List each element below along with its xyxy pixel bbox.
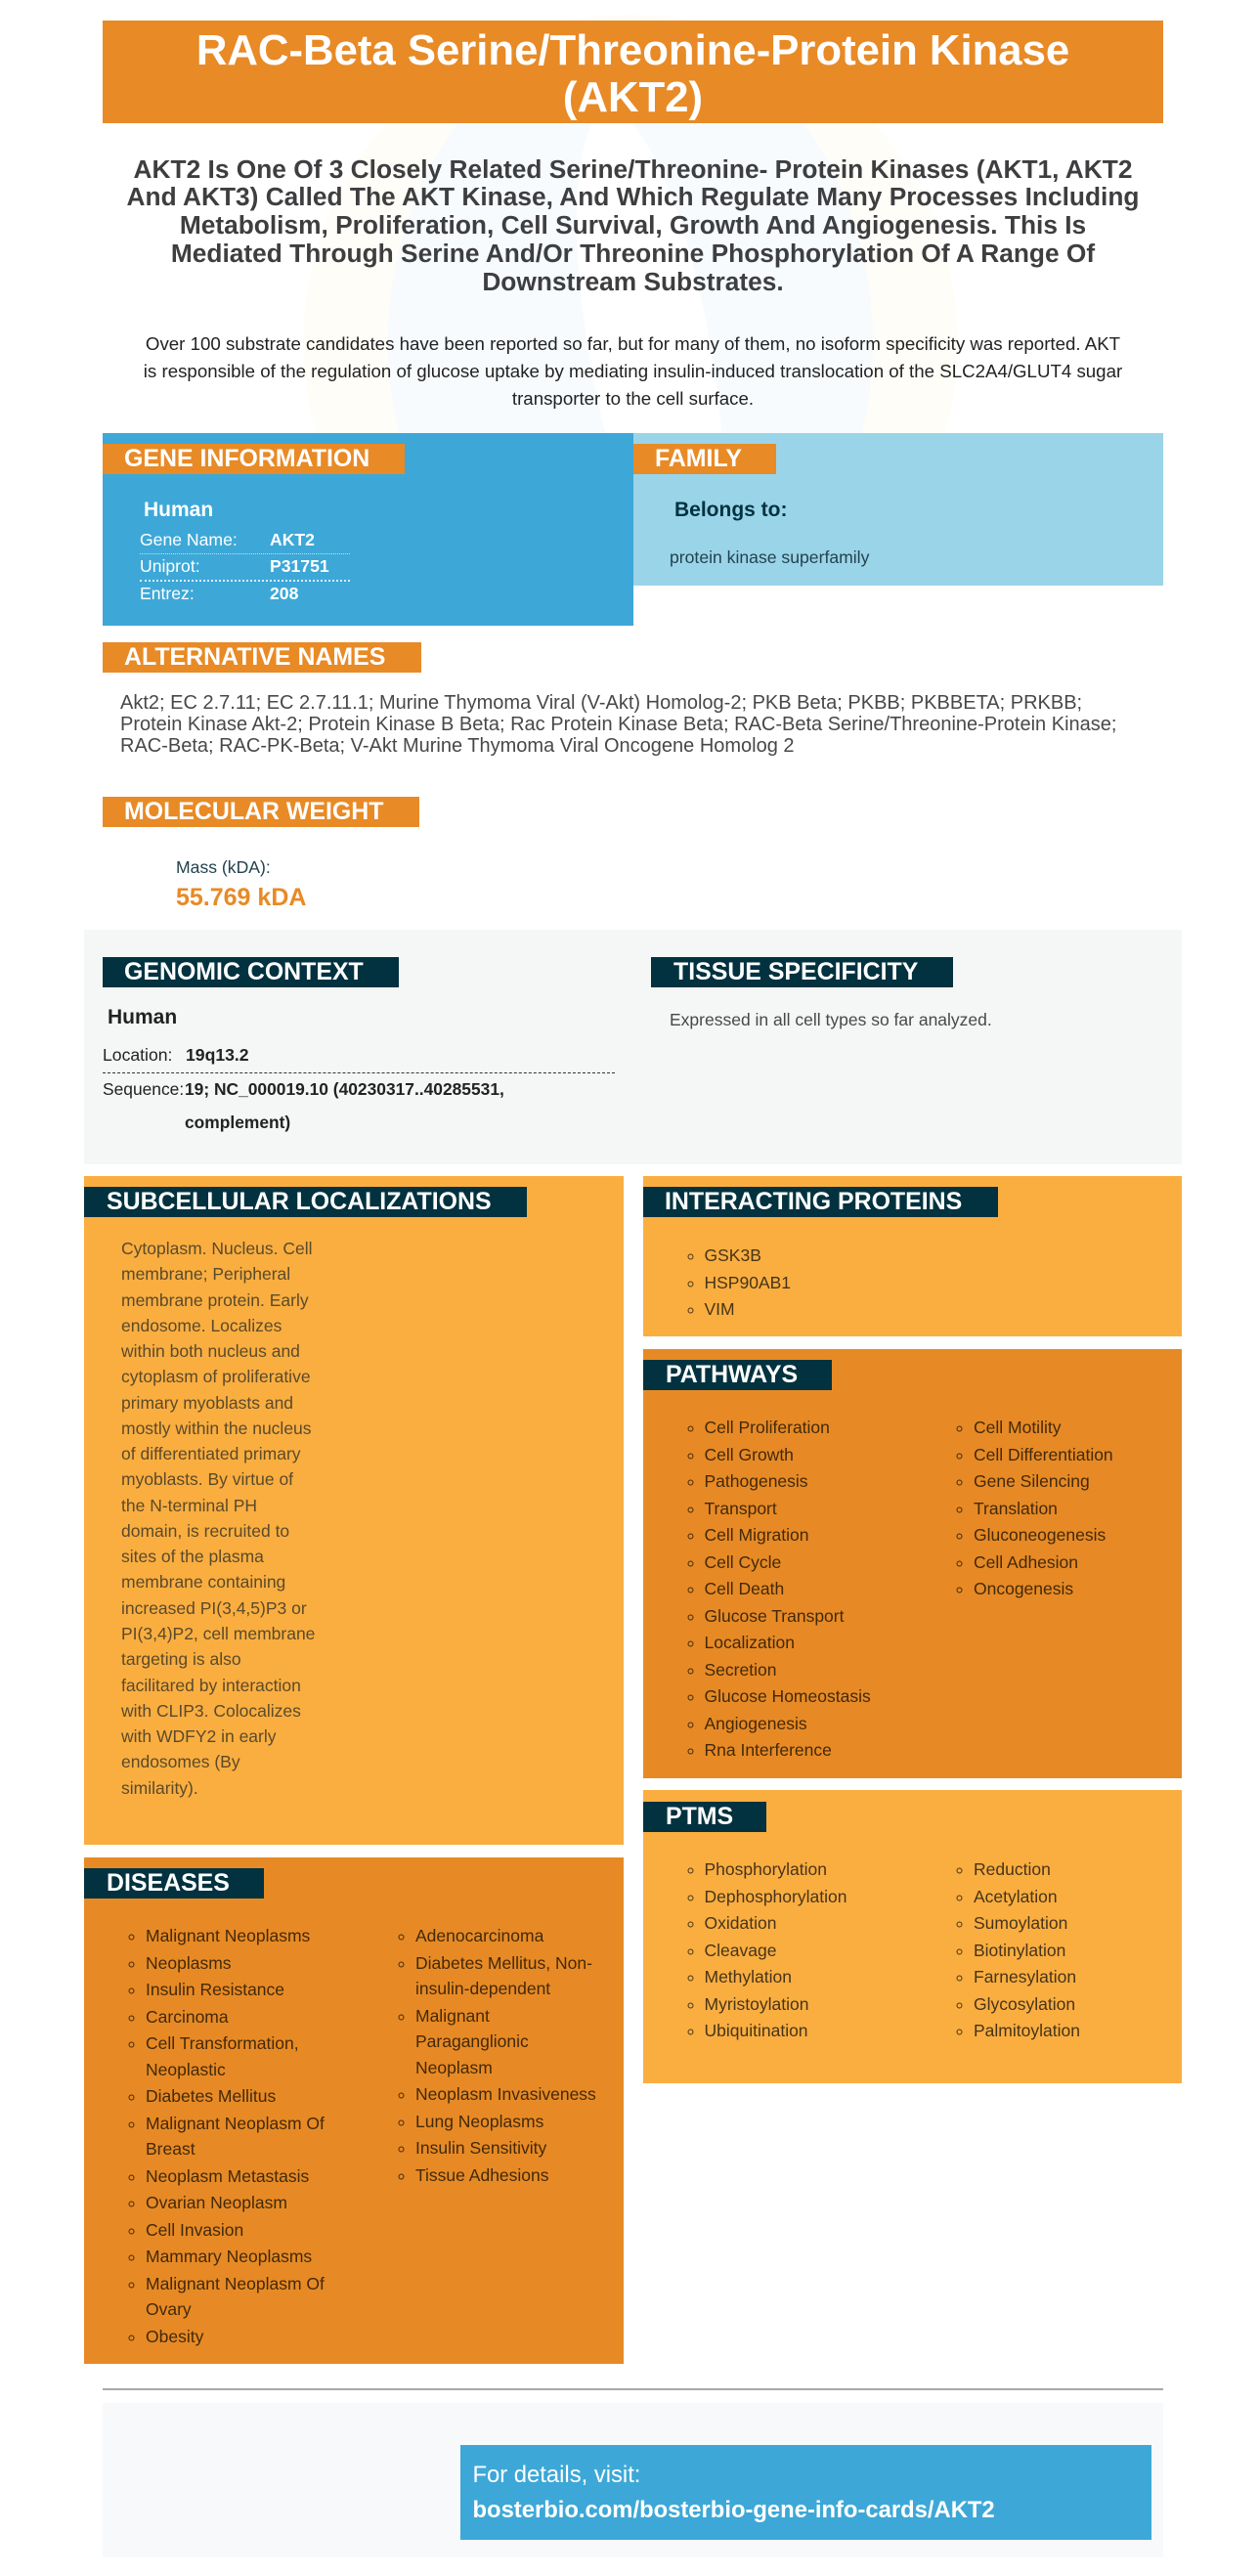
ptms list column 2: Palmitoylation [974, 2021, 1080, 2040]
diseases list column 1: Mammary Neoplasms [146, 2247, 312, 2266]
heading: ptms: PTMS [666, 1803, 733, 1830]
diseases list column 1: Breast [146, 2139, 195, 2159]
interacting proteins list [688, 1245, 791, 1319]
intro paragraph [144, 333, 1122, 409]
pathways list column 1: Rna Interference [704, 1740, 832, 1760]
molecular weight value [176, 857, 306, 911]
localization text: facilitared by interaction [121, 1676, 301, 1695]
pathways list column 1: Cell Death [704, 1579, 784, 1598]
localization text: primary myoblasts and [121, 1393, 293, 1413]
panel: diseases [84, 1857, 624, 2364]
intro paragraph: Over 100 substrate candidates have been reported so far, but for many of them, no isoform specificity was reported. AKT [146, 333, 1120, 354]
diseases list column 1: Malignant Neoplasm Of [146, 2114, 325, 2133]
localization text: sites of the plasma [121, 1547, 264, 1566]
pathways list column 1: Cell Proliferation [704, 1418, 830, 1437]
pathways list column 2: Gluconeogenesis [974, 1525, 1106, 1545]
diseases list column 1: Carcinoma [146, 2007, 229, 2027]
interacting proteins list: VIM [704, 1299, 735, 1319]
localization text: membrane containing [121, 1572, 285, 1592]
heading: alternative names: ALTERNATIVE NAMES [124, 643, 385, 671]
ptms list column 2: Reduction [974, 1859, 1051, 1879]
tissue specificity text: Expressed in all cell types so far analyzed. [670, 1010, 992, 1029]
title banner [103, 21, 1163, 123]
summary heading: Metabolism, Proliferation, Cell Survival, Growth And Angiogenesis. This Is [180, 210, 1086, 240]
heading: family: FAMILY [655, 445, 742, 472]
species label: Human [144, 499, 213, 521]
panel: gene information [103, 433, 633, 626]
diseases list column 1: Malignant Neoplasms [146, 1926, 310, 1945]
pathways list column 1: Transport [704, 1498, 777, 1517]
localization text: of differentiated primary [121, 1444, 301, 1463]
diseases list column 2: Lung Neoplasms [415, 2112, 543, 2131]
gene name row: Gene Name: [140, 530, 238, 549]
uniprot row: P31751 [270, 556, 329, 576]
diseases list column 2: Neoplasm Invasiveness [415, 2084, 596, 2104]
localization text: myoblasts. By virtue of [121, 1469, 293, 1489]
intro paragraph: transporter to the cell surface. [512, 388, 754, 409]
location row [103, 1043, 615, 1073]
belongs to label: Belongs to: [674, 499, 788, 521]
panel: interacting proteins [643, 1176, 1182, 1336]
entrez row [140, 584, 298, 603]
pathways list column 1: Localization [704, 1633, 795, 1652]
diseases list column 1: Malignant Neoplasm Of [146, 2274, 325, 2293]
title banner: RAC-Beta Serine/Threonine-Protein Kinase [196, 26, 1069, 74]
gene name row: AKT2 [270, 530, 315, 549]
footer panel [103, 2403, 1163, 2557]
panel: ptms [643, 1790, 1182, 2083]
heading: subcellular localizations: SUBCELLULAR LOCALIZATIONS [107, 1188, 492, 1215]
heading: diseases: DISEASES [107, 1869, 230, 1897]
localization text: the N-terminal PH [121, 1496, 257, 1515]
diseases list column 1 [129, 1926, 325, 2346]
localization text: membrane protein. Early [121, 1290, 309, 1310]
ptms list column 1: Oxidation [704, 1913, 776, 1933]
diseases list column 1: Diabetes Mellitus [146, 2086, 276, 2106]
details label: For details, visit: [473, 2462, 640, 2488]
gene name row [140, 528, 350, 554]
ptms list column 2 [956, 1859, 1080, 2040]
diseases list column 2: Diabetes Mellitus, Non- [415, 1953, 592, 1973]
entrez row: 208 [270, 584, 298, 603]
species label: Human [108, 1006, 177, 1028]
localization text: increased PI(3,4,5)P3 or [121, 1598, 307, 1618]
pathways list column 2: Cell Differentiation [974, 1445, 1113, 1464]
diseases list column 2: Adenocarcinoma [415, 1926, 543, 1945]
ptms list column 1: Myristoylation [704, 1994, 808, 2014]
location row: Location: [103, 1045, 172, 1065]
diseases list column 1: Ovary [146, 2299, 192, 2319]
ptms list column 2: Glycosylation [974, 1994, 1075, 2014]
alternative names text: Protein Kinase Akt-2; Protein Kinase B Beta; Rac Protein Kinase Beta; RAC-Beta Serine/Threonine-Protein Kinase; [120, 714, 1116, 735]
diseases list column 1: Neoplasms [146, 1953, 232, 1973]
pathways list column 2: Oncogenesis [974, 1579, 1073, 1598]
pathways list column 2: Gene Silencing [974, 1471, 1090, 1491]
diseases list column 2: Malignant [415, 2006, 490, 2026]
uniprot row [140, 554, 350, 582]
diseases list column 1: Insulin Resistance [146, 1980, 284, 1999]
diseases list column 2 [399, 1926, 596, 2185]
pathways list column 2: Cell Motility [974, 1418, 1061, 1437]
diseases list column 1: Neoplasm Metastasis [146, 2166, 309, 2186]
interacting proteins list: HSP90AB1 [704, 1273, 791, 1292]
localization text: PI(3,4)P2, cell membrane [121, 1624, 315, 1643]
alternative names text: RAC-Beta; RAC-PK-Beta; V-Akt Murine Thymoma Viral Oncogene Homolog 2 [120, 735, 795, 757]
pathways list column 2 [956, 1418, 1113, 1598]
localization text: domain, is recruited to [121, 1521, 289, 1541]
summary heading: And AKT3) Called The AKT Kinase, And Which Regulate Many Processes Including [127, 182, 1139, 211]
localization text: with WDFY2 in early [121, 1726, 277, 1746]
ptms list column 1: Phosphorylation [704, 1859, 827, 1879]
ptms list column 1: Ubiquitination [704, 2021, 808, 2040]
family value: protein kinase superfamily [670, 547, 869, 567]
callout: details link [460, 2445, 1151, 2540]
details url: bosterbio.com/bosterbio-gene-info-cards/AKT2 [473, 2497, 995, 2523]
pathways list column 1 [688, 1418, 871, 1760]
panel: family [633, 433, 1163, 586]
heading: interacting proteins: INTERACTING PROTEINS [665, 1188, 962, 1215]
pathways list column 1: Secretion [704, 1660, 776, 1680]
interacting proteins list: GSK3B [704, 1245, 761, 1265]
diseases list column 2: Neoplasm [415, 2058, 493, 2077]
pathways list column 1: Glucose Transport [704, 1605, 844, 1625]
pathways list column 1: Pathogenesis [704, 1471, 808, 1491]
diseases list column 2: insulin-dependent [415, 1979, 550, 1998]
heading: ptms [643, 1802, 766, 1832]
pathways list column 1: Cell Cycle [704, 1552, 781, 1572]
heading: pathways [643, 1360, 832, 1390]
localization text: endosomes (By [121, 1752, 240, 1771]
uniprot row: Uniprot: [140, 556, 200, 576]
summary heading [127, 154, 1139, 296]
localization text: Cytoplasm. Nucleus. Cell [121, 1239, 312, 1258]
pathways list column 2: Translation [974, 1498, 1058, 1517]
location row: 19q13.2 [186, 1045, 249, 1065]
heading: genomic context: GENOMIC CONTEXT [124, 958, 364, 985]
panel: genomic context and tissue specificity [84, 930, 1182, 1164]
alternative names text: Akt2; EC 2.7.11; EC 2.7.11.1; Murine Thymoma Viral (V-Akt) Homolog-2; PKB Beta; PKBB; PKBBETA; PRKBB; [120, 692, 1082, 714]
localization text: with CLIP3. Colocalizes [121, 1701, 301, 1721]
ptms list column 1: Methylation [704, 1967, 792, 1987]
localization text: membrane; Peripheral [121, 1264, 290, 1284]
background watermark logo [0, 0, 1259, 450]
sequence row: complement) [185, 1113, 290, 1132]
localization text: targeting is also [121, 1649, 241, 1669]
ptms list column 1: Cleavage [704, 1940, 776, 1959]
panel: subcellular localizations [84, 1176, 624, 1845]
localization text: within both nucleus and [121, 1341, 300, 1361]
diseases list column 1: Ovarian Neoplasm [146, 2193, 287, 2212]
ptms list column 2: Sumoylation [974, 1913, 1067, 1933]
ptms list column 1 [688, 1859, 847, 2040]
diseases list column 1: Cell Transformation, [146, 2033, 299, 2053]
ptms list column 1: Dephosphorylation [704, 1887, 847, 1906]
heading: gene information: GENE INFORMATION [124, 445, 369, 472]
mass value: 55.769 kDA [176, 884, 306, 911]
localization text: similarity). [121, 1778, 198, 1798]
diseases list column 2: Paraganglionic [415, 2031, 529, 2051]
localization text: endosome. Localizes [121, 1316, 282, 1335]
title banner: (AKT2) [563, 73, 703, 121]
diseases list column 1: Cell Invasion [146, 2220, 243, 2240]
diseases list column 2: Tissue Adhesions [415, 2165, 549, 2185]
pathways list column 1: Cell Migration [704, 1525, 808, 1545]
ptms list column 2: Acetylation [974, 1887, 1058, 1906]
pathways list column 1: Cell Growth [704, 1445, 794, 1464]
heading: tissue specificity: TISSUE SPECIFICITY [673, 958, 918, 985]
diseases list column 2: Insulin Sensitivity [415, 2138, 546, 2158]
heading: family [633, 444, 776, 474]
localization text: cytoplasm of proliferative [121, 1367, 311, 1386]
heading: molecular weight: MOLECULAR WEIGHT [124, 798, 383, 825]
heading: diseases [84, 1868, 264, 1899]
summary heading: Mediated Through Serine And/Or Threonine Phosphorylation Of A Range Of [171, 239, 1095, 268]
intro paragraph: is responsible of the regulation of glucose uptake by mediating insulin-induced translocation of the SLC2A4/GLUT4 sugar [144, 361, 1122, 381]
alternative names text [120, 692, 1116, 757]
panel: pathways [643, 1349, 1182, 1778]
heading: pathways: PATHWAYS [666, 1361, 798, 1388]
pathways list column 2: Cell Adhesion [974, 1552, 1078, 1572]
entrez row: Entrez: [140, 584, 195, 603]
sequence row: Sequence: [103, 1079, 184, 1099]
summary heading: AKT2 Is One Of 3 Closely Related Serine/Threonine- Protein Kinases (AKT1, AKT2 [134, 154, 1132, 184]
sequence row [103, 1079, 504, 1132]
localization text: mostly within the nucleus [121, 1419, 312, 1438]
localization text [121, 1239, 315, 1798]
summary heading: Downstream Substrates. [482, 267, 784, 296]
pathways list column 1: Glucose Homeostasis [704, 1686, 871, 1706]
ptms list column 2: Farnesylation [974, 1967, 1076, 1987]
mass label: Mass (kDA): [176, 857, 271, 877]
ptms list column 2: Biotinylation [974, 1940, 1065, 1959]
diseases list column 1: Obesity [146, 2327, 203, 2346]
pathways list column 1: Angiogenesis [704, 1713, 807, 1732]
sequence row: 19; NC_000019.10 (40230317..40285531, [185, 1079, 504, 1099]
diseases list column 1: Neoplastic [146, 2060, 226, 2079]
